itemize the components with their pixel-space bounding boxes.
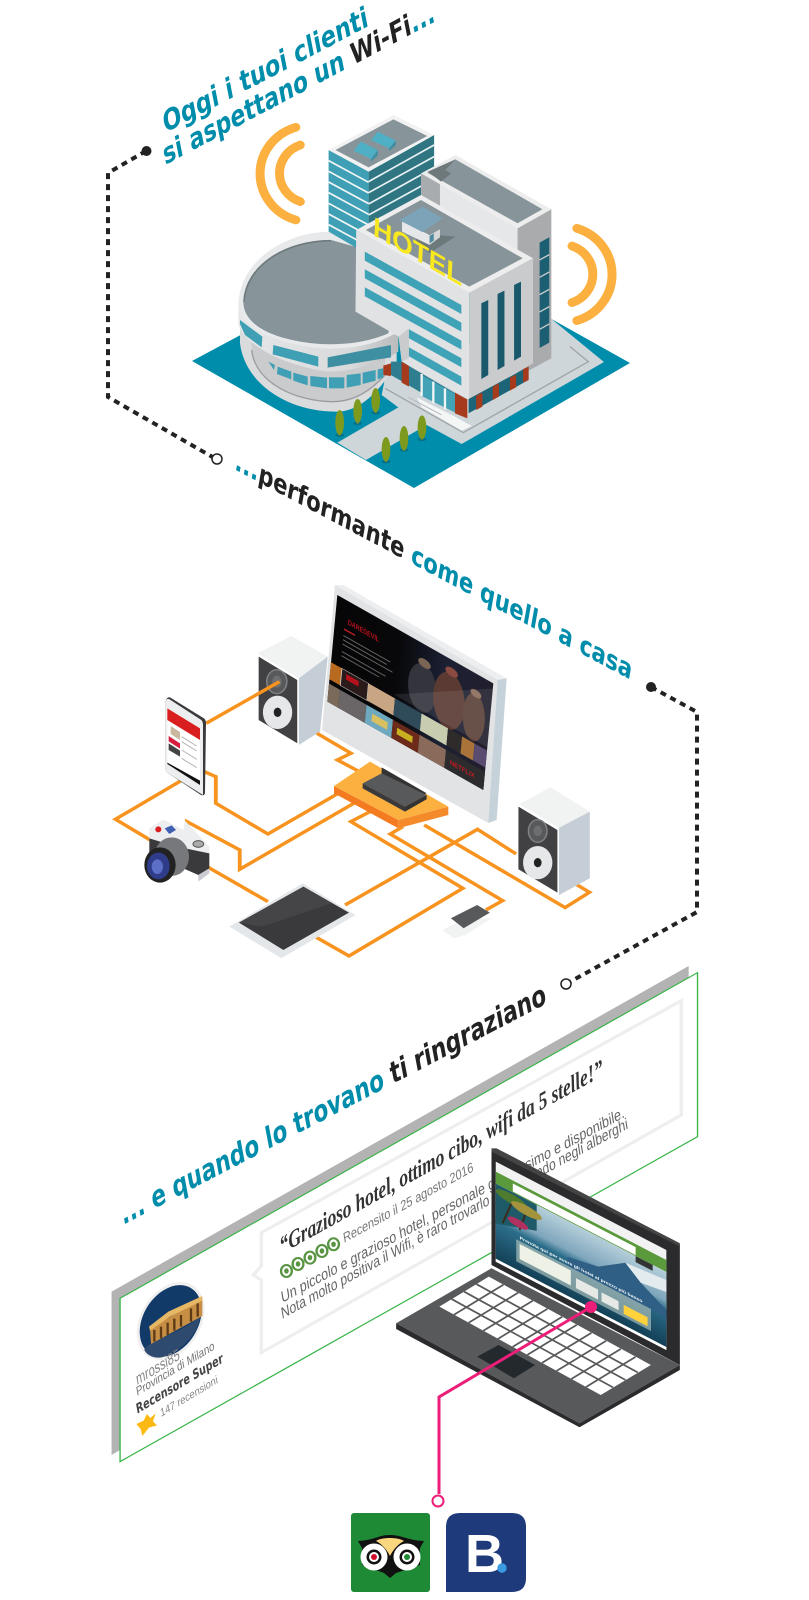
heading: performante come quello a casa: ...performante come quello a casa — [233, 445, 635, 686]
laptop screen — [496, 1162, 666, 1350]
entrance plate — [417, 397, 472, 431]
reviewer details: Recensore Super — [135, 1350, 225, 1418]
logo: TripAdvisor — [351, 1513, 430, 1592]
green header — [496, 1172, 666, 1272]
dotted connector: right — [561, 682, 697, 989]
logo: Booking: B — [465, 1524, 504, 1584]
heading: Oggi i tuoi clienti si aspettano un Wi-Fi: Oggi i tuoi clienti — [160, 0, 371, 140]
tower roof — [329, 115, 434, 172]
drum rim — [238, 232, 403, 348]
grey card shadow — [112, 966, 689, 1455]
illustration: hotel building — [192, 115, 630, 488]
yellow button — [624, 1305, 648, 1326]
drum roof — [243, 240, 403, 344]
tower right face — [369, 135, 434, 240]
right speaker — [518, 787, 590, 896]
orange wires — [115, 682, 589, 956]
mountain — [567, 1233, 666, 1318]
nav band — [513, 1183, 636, 1255]
drum lower windows — [268, 362, 383, 388]
heading: e quando lo trovano ti ringraziano: ... e quando lo trovano ti ringraziano — [118, 977, 549, 1232]
trees — [335, 388, 426, 463]
netflix mark: NETFLIX — [449, 758, 475, 780]
star — [136, 1413, 157, 1436]
drum upper windows — [240, 320, 391, 368]
show description — [341, 629, 394, 684]
palm trees — [496, 1184, 542, 1247]
pavement — [337, 318, 604, 460]
tv stand neck — [382, 767, 427, 800]
hero photo — [496, 1184, 666, 1348]
search panel — [516, 1239, 651, 1331]
green card border — [120, 973, 698, 1462]
review date: Recensito il 25 agosto 2016 — [342, 1158, 474, 1246]
screen characters — [406, 645, 488, 749]
tv screen — [327, 595, 493, 790]
speech bubble — [253, 1001, 681, 1353]
icon: wifi waves left — [260, 127, 300, 220]
keyboard — [439, 1277, 651, 1395]
dotted connector: top left — [108, 146, 222, 464]
back block roof — [421, 155, 551, 228]
left speaker — [257, 636, 328, 746]
logo: Booking — [446, 1513, 526, 1592]
review title: “Grazioso hotel, ottimo cibo, wifi da 5 stelle!” — [278, 1054, 605, 1259]
back block side walls — [421, 173, 518, 267]
heading: Oggi i tuoi clienti si aspettano un Wi-Fi: si aspettano un Wi-Fi... — [160, 0, 438, 172]
review body: Un piccolo e grazioso hotel, personale gentilissimo e disponibile. — [280, 1104, 626, 1307]
drum upper band — [238, 310, 398, 372]
tablet — [229, 883, 356, 958]
back block windows — [540, 237, 549, 348]
white hinge strip — [496, 1259, 666, 1350]
reviewer avatar and star — [123, 1269, 218, 1436]
reviewer details: Provincia di Milano — [135, 1339, 216, 1399]
camera — [144, 819, 209, 883]
lower drum — [240, 317, 397, 412]
search heading: Prenota qui per avere gli hotel al prezzo più basso — [520, 1236, 643, 1304]
smartphone — [166, 697, 206, 795]
rating circles — [281, 1238, 339, 1277]
main block roof — [356, 195, 533, 293]
pink connector — [432, 1301, 597, 1506]
poster tiles — [327, 662, 487, 790]
review body: Nota molto positiva il Wifi, è raro trovarlo funzionando negli alberghi — [280, 1116, 629, 1323]
icon: wifi waves right — [572, 228, 612, 321]
daredevil title: DAREDEVIL — [348, 619, 379, 644]
router — [334, 762, 448, 828]
trackpad — [477, 1345, 535, 1378]
tv frame — [322, 585, 507, 823]
hotel sign: HOTEL — [372, 211, 463, 292]
tower left face — [329, 150, 369, 255]
reviewer details: mrossi85 — [135, 1346, 181, 1389]
plaza outline — [385, 347, 588, 433]
right vertical windows — [481, 282, 521, 379]
main block left face — [355, 230, 469, 400]
wall shadow — [399, 328, 409, 362]
main block right face — [469, 258, 533, 399]
laptop base — [396, 1268, 680, 1423]
illustration: connected devices — [115, 585, 590, 958]
laptop lid — [491, 1148, 680, 1365]
roof cabin — [399, 207, 455, 253]
set-top box — [363, 773, 427, 807]
round wing and plaza — [238, 232, 604, 463]
reviewer details: 147 recensioni — [159, 1373, 219, 1420]
usb stick — [442, 905, 491, 938]
illustration: laptop — [396, 1148, 680, 1427]
review card frame — [112, 966, 698, 1462]
roof units — [354, 132, 396, 162]
avatar — [123, 1269, 218, 1373]
left windows — [365, 252, 461, 386]
ground plot — [192, 242, 630, 488]
ground floor entrance — [383, 362, 467, 418]
